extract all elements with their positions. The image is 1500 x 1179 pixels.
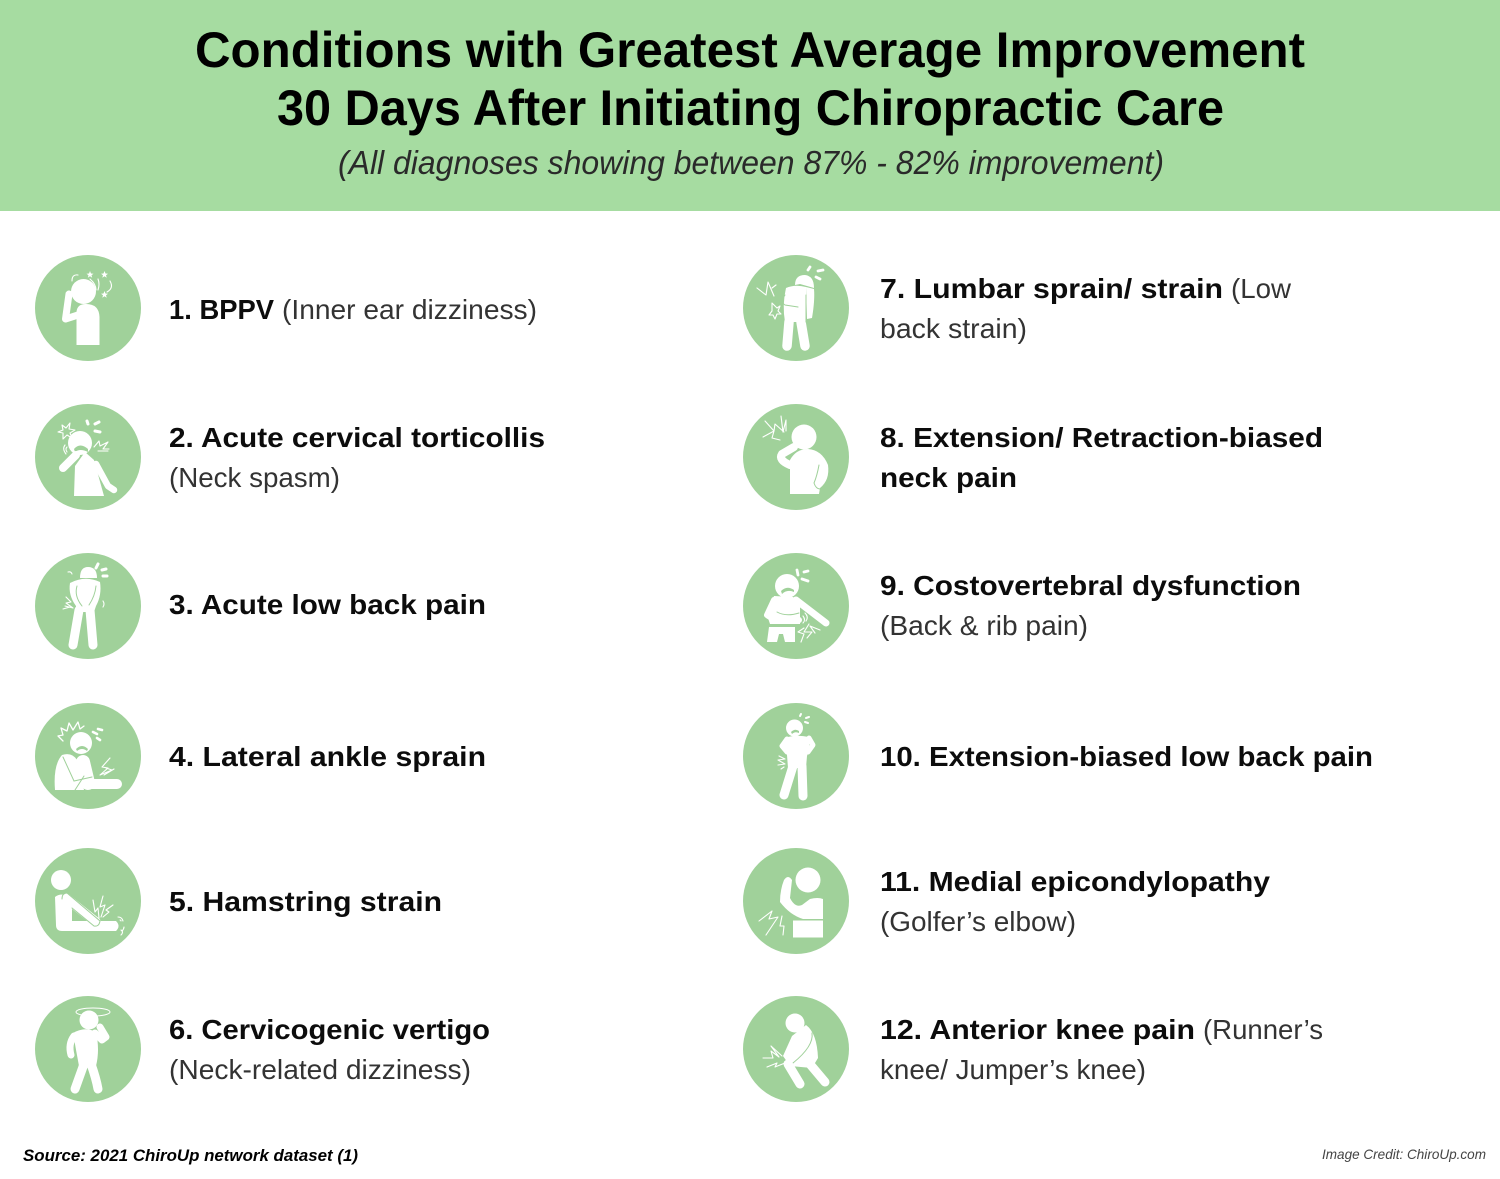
- label: (Runner’s: [1203, 1014, 1323, 1045]
- label: 9. Costovertebral dysfunction: [880, 570, 1301, 601]
- icon: figure holding knee: [743, 996, 849, 1102]
- label: 12. Anterior knee pain: [880, 1014, 1195, 1045]
- icon: standing figure with back pain: [743, 703, 849, 809]
- icon: bent figure holding back: [35, 553, 141, 659]
- label: [169, 294, 537, 325]
- title: Conditions with Greatest Average Improvement: [195, 22, 1305, 78]
- item 12: anterior knee pain: [743, 996, 1323, 1102]
- label: 7. Lumbar sprain/ strain: [880, 273, 1223, 304]
- label: (Neck-related dizziness): [169, 1054, 471, 1085]
- label: 11. Medial epicondylopathy: [880, 866, 1270, 897]
- label: 4. Lateral ankle sprain: [169, 741, 486, 772]
- label: [880, 866, 1270, 937]
- label: 10. Extension-biased low back pain: [880, 741, 1373, 772]
- item 4: ankle sprain: [35, 703, 486, 809]
- item 2: torticollis: [35, 404, 545, 510]
- label: (Golfer’s elbow): [880, 906, 1076, 937]
- title: 30 Days After Initiating Chiropractic Care: [277, 80, 1224, 136]
- icon: dizzy head: [35, 255, 141, 361]
- label: [169, 1014, 490, 1085]
- label: 1. BPPV: [169, 294, 274, 325]
- icon: dizzy standing figure: [35, 996, 141, 1102]
- icon: seated figure holding ankle: [35, 703, 141, 809]
- subtitle: (All diagnoses showing between 87% - 82% improvement): [338, 144, 1164, 181]
- label: (Back & rib pain): [880, 610, 1088, 641]
- label: 5. Hamstring strain: [169, 886, 442, 917]
- label: (Neck spasm): [169, 462, 340, 493]
- icon: neck spasm: [35, 404, 141, 510]
- item 8: neck pain: [743, 404, 1323, 510]
- label: knee/ Jumper’s knee): [880, 1054, 1146, 1085]
- label: back strain): [880, 313, 1027, 344]
- icon: figure holding neck: [743, 404, 849, 510]
- item 5: hamstring strain: [35, 848, 442, 954]
- header banner: [0, 0, 1500, 211]
- label: 2. Acute cervical torticollis: [169, 422, 545, 453]
- label: 6. Cervicogenic vertigo: [169, 1014, 490, 1045]
- item 11: golfer's elbow: [743, 848, 1270, 954]
- item 6: cervicogenic vertigo: [35, 996, 490, 1102]
- label: [169, 422, 545, 493]
- label: 3. Acute low back pain: [169, 589, 486, 620]
- label: (Low: [1231, 273, 1292, 304]
- icon: figure holding ribs: [743, 553, 849, 659]
- label: neck pain: [880, 462, 1017, 493]
- image credit: Image Credit: ChiroUp.com: [1322, 1146, 1486, 1162]
- icon: figure holding lower back: [743, 255, 849, 361]
- label: [880, 570, 1301, 641]
- icon: seated figure reaching for leg: [35, 848, 141, 954]
- item 3: low back pain: [35, 553, 486, 659]
- icon: figure holding elbow: [743, 848, 849, 954]
- label: [880, 422, 1323, 493]
- label: (Inner ear dizziness): [282, 294, 537, 325]
- title: [195, 22, 1305, 136]
- source note: Source: 2021 ChiroUp network dataset (1): [23, 1147, 359, 1165]
- item 1: BPPV: [35, 255, 537, 361]
- label: 8. Extension/ Retraction-biased: [880, 422, 1323, 453]
- item 9: costovertebral dysfunction: [743, 553, 1301, 659]
- item 7: lumbar strain: [743, 255, 1292, 361]
- label: [880, 1014, 1323, 1085]
- item 10: extension low back pain: [743, 703, 1373, 809]
- label: [880, 273, 1292, 344]
